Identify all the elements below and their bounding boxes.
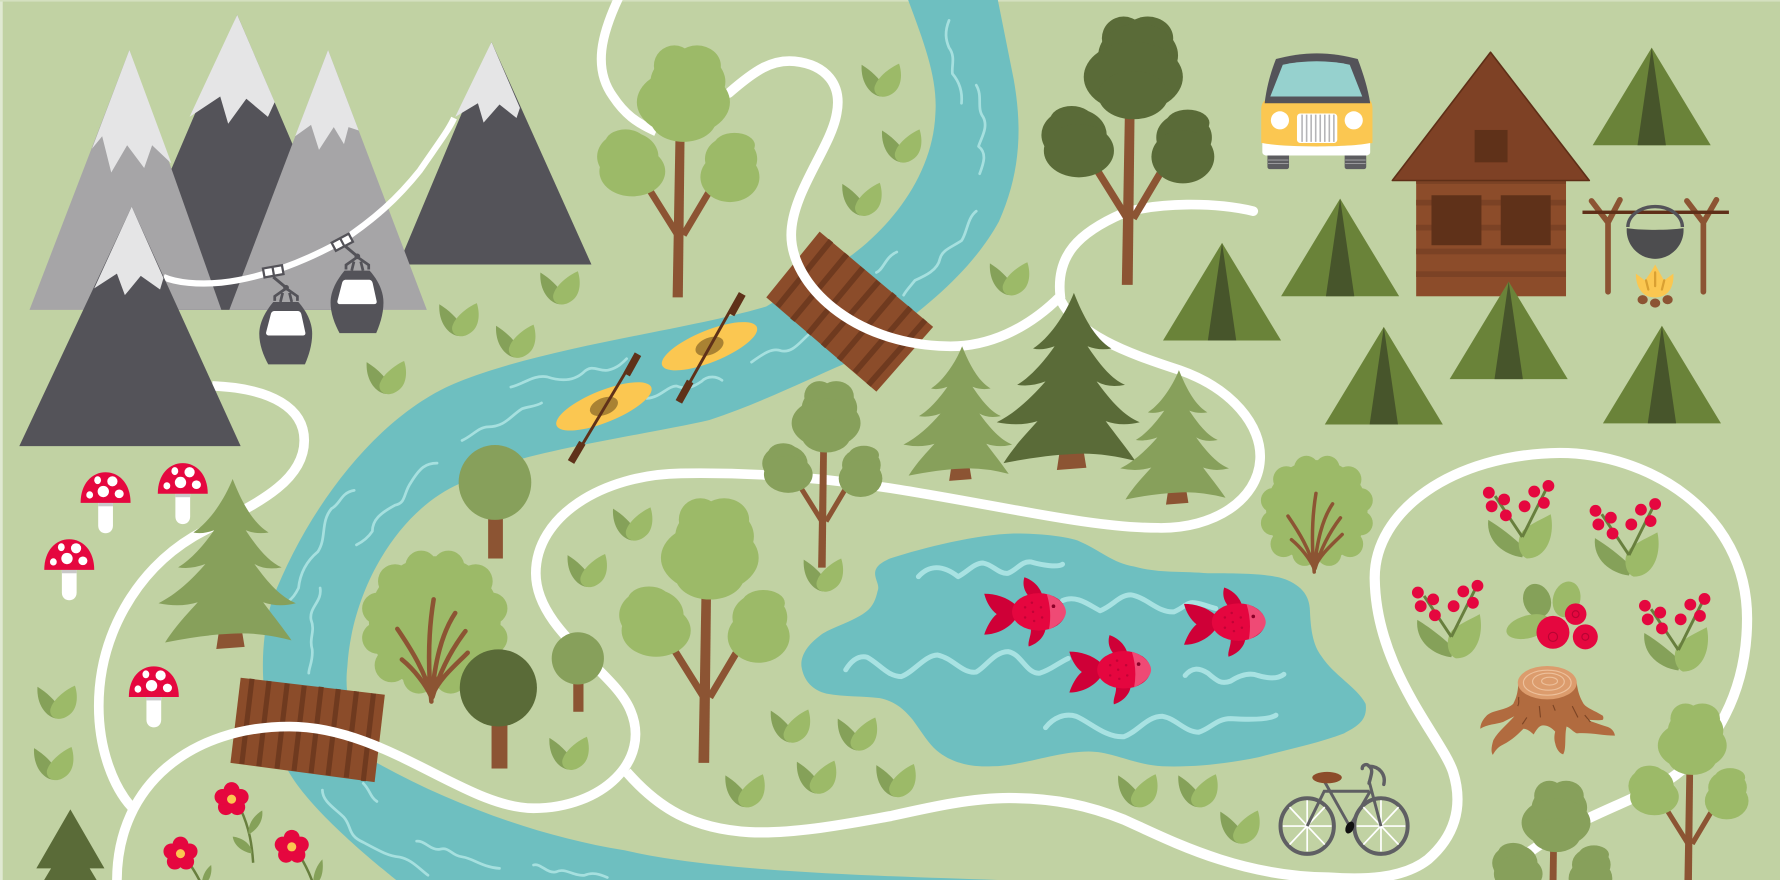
van [1261, 53, 1372, 169]
trail: around the berry meadow [627, 453, 1747, 878]
tree: bottom right light [1628, 704, 1749, 880]
bicycle [1281, 765, 1408, 854]
tree: big lower centre [619, 498, 790, 763]
flowers [163, 782, 323, 880]
lake ripples [846, 562, 1284, 737]
tent: in front of cabin [1450, 282, 1568, 379]
round tree: dark [460, 649, 537, 769]
round tree: medium [459, 445, 531, 559]
round tree: small [552, 632, 604, 712]
trail: winding main path [729, 61, 1253, 346]
cooking pot over campfire [1582, 200, 1729, 308]
gondola: upper [331, 234, 383, 333]
tents [1163, 48, 1721, 425]
berry sprigs [1412, 480, 1710, 672]
gondola: lower [259, 265, 312, 364]
cranberry plant [1504, 578, 1598, 649]
trail: from mountains down left side [99, 386, 304, 809]
bridge: upper [766, 232, 933, 392]
fish: right [1184, 587, 1266, 657]
trail: through the forest and over the lower bridge [117, 300, 1260, 880]
kayak: lower [551, 354, 657, 462]
conifer: by the river [159, 479, 296, 649]
river ripples [289, 20, 985, 878]
bush with reeds: right of lake [1261, 456, 1373, 573]
trail: top curve to viewpoint [601, 0, 656, 132]
fish: centre [1069, 635, 1151, 704]
conifer: dark forest [997, 293, 1140, 470]
conifer: forest left [903, 346, 1012, 481]
tree: centre medium [762, 381, 882, 568]
conifer: bottom left [34, 809, 107, 880]
kayak: upper [656, 293, 763, 402]
conifer: forest right [1120, 370, 1229, 505]
mountains: back range [30, 15, 591, 310]
sprouts [34, 64, 1260, 844]
bush with reeds: river island [362, 551, 507, 703]
mountain: front [19, 207, 241, 446]
tree: dark top [1041, 17, 1214, 285]
cabin [1392, 52, 1589, 296]
tree: top centre [597, 45, 759, 297]
mushrooms [44, 463, 208, 727]
river [263, 0, 1022, 880]
cable car line [163, 118, 454, 284]
bridge: lower [230, 678, 385, 782]
lake [801, 534, 1366, 766]
fish: left [984, 577, 1066, 646]
tree: bottom right medium [1492, 781, 1612, 880]
tree stump [1480, 666, 1615, 755]
